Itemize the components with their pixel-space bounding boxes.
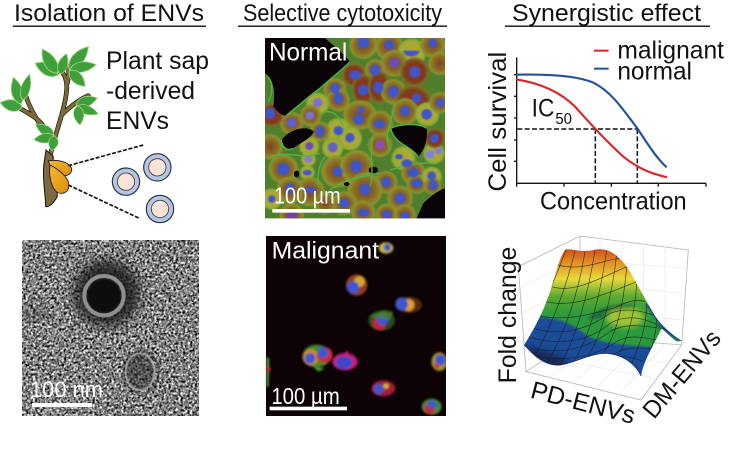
cell bodies [265, 38, 445, 218]
legend: normal [617, 58, 692, 85]
large vesicle [84, 276, 124, 315]
scale bar: 100 µm: 100 µm [271, 383, 340, 409]
blue far right ridge [645, 304, 684, 343]
icon: orange sap galls [48, 160, 72, 193]
dark background gaps [265, 38, 445, 218]
label: IC50: 50 [555, 111, 572, 128]
scale bar: 100 nm: 100 nm [30, 377, 103, 402]
label: Normal: Normal [269, 39, 347, 67]
heading: Selective cytotoxicity: Selective cytotoxicity [243, 0, 442, 27]
surface edge [524, 345, 641, 376]
icon: dashed callout lines [68, 145, 143, 218]
heading: Isolation of ENVs: Isolation of ENVs [14, 0, 204, 27]
panel: Normal cells micrograph [265, 38, 445, 218]
text: Plant sap-derived ENVs: ENVs [106, 107, 169, 135]
saddle shadow [587, 304, 637, 320]
plot box [518, 236, 688, 400]
mesh lines [524, 249, 667, 376]
nuclei [265, 37, 444, 219]
dark halo around vesicle [73, 260, 140, 327]
x-axis label: Concentration [540, 189, 687, 216]
legend: malignant [617, 37, 724, 64]
y-axis label: Cell survival [484, 52, 512, 192]
icon: plant trunk [43, 150, 57, 207]
green membrane highlights [266, 62, 437, 190]
yellow-green bump [606, 307, 644, 327]
label: IC50 [532, 95, 572, 128]
text: Plant sap-derived ENVs: Plant sap [106, 47, 209, 75]
chart axes [514, 57, 706, 187]
panel: 3D surface plot [494, 236, 727, 430]
darker front corner [530, 347, 570, 368]
icon: vesicles [112, 154, 174, 223]
icon: plant branches [18, 67, 88, 157]
scale bar: 100 µm: 100 µm [274, 182, 341, 208]
surface [524, 249, 682, 376]
curve: malignant [516, 79, 667, 177]
y-axis label: DM-ENVs [638, 325, 727, 424]
text: Plant sap-derived ENVs: -derived [106, 77, 195, 105]
panel: Malignant cells micrograph [266, 236, 447, 416]
z-axis label: Fold change [494, 247, 522, 383]
heading: Synergistic effect: Synergistic effect [512, 0, 701, 27]
label: IC50: IC [532, 95, 554, 123]
panel: cell survival chart [484, 37, 724, 216]
blue lower band [524, 316, 653, 376]
panel: TEM micrograph [22, 240, 199, 416]
label: Malignant: Malignant [272, 237, 379, 264]
small vesicle [124, 351, 159, 394]
legend [594, 37, 724, 85]
curve: normal [516, 75, 667, 167]
icon: leaves [0, 42, 100, 152]
text: Plant sap-derived ENVs [106, 47, 209, 135]
dashed IC50 guides [517, 129, 637, 183]
x-axis label: PD-ENVs [528, 377, 638, 430]
malignant cell clusters [266, 242, 447, 415]
panel: plant illustration [0, 42, 174, 223]
